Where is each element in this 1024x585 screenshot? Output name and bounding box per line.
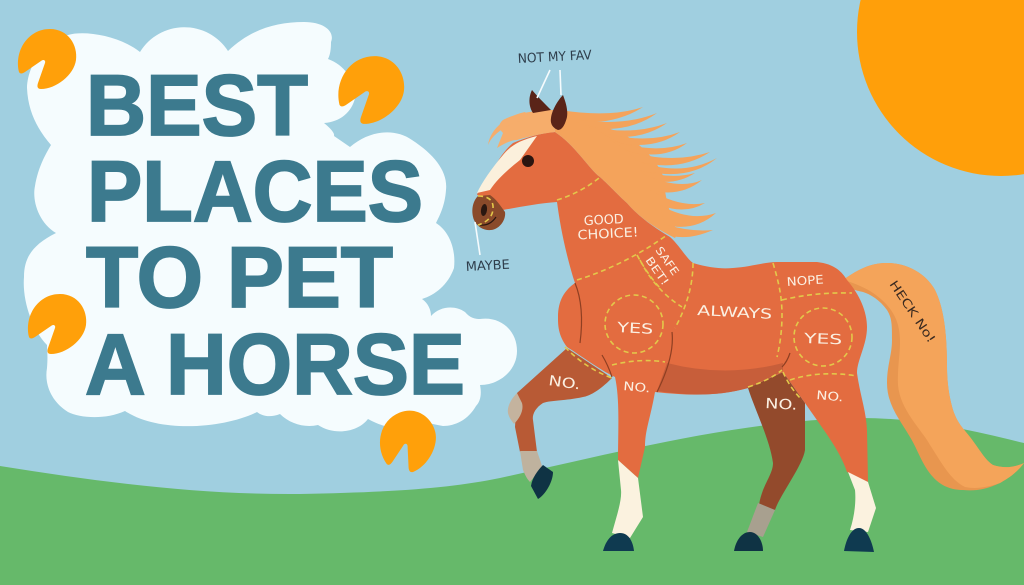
belly shading	[657, 363, 783, 394]
ears	[529, 90, 567, 130]
green hill	[0, 418, 1024, 585]
label: safe bet: SAFE	[653, 244, 682, 278]
label: good choice: GOOD	[583, 212, 624, 229]
eye	[522, 155, 534, 167]
title: BEST	[86, 58, 308, 154]
label: yes shoulder: YES	[615, 320, 654, 338]
labels on horse	[465, 48, 938, 414]
lifted front leg	[508, 348, 612, 499]
nostril and mouth	[478, 196, 496, 225]
label: no back leg: NO.	[765, 396, 798, 414]
hind leg sock and hoof	[844, 472, 876, 552]
horse body and head	[477, 132, 868, 482]
body crease lines	[575, 283, 790, 392]
label: nope: NOPE	[786, 272, 824, 289]
label: no front leg: NO.	[623, 379, 651, 395]
horse illustration	[465, 48, 1024, 552]
label: good choice: CHOICE!	[577, 225, 639, 244]
label: heck no: HECK No!	[887, 278, 938, 345]
tail	[843, 263, 1024, 490]
label: safe bet	[643, 244, 682, 288]
orange hoof print top right	[338, 56, 404, 124]
dashed cut lines	[557, 178, 857, 400]
label: no lifted leg: NO.	[547, 373, 581, 393]
label: no hind leg: NO.	[816, 388, 844, 404]
front leg sock and hoof	[603, 460, 643, 551]
label: not my fav: NOT MY FAV	[517, 48, 592, 67]
blaze	[477, 136, 537, 193]
title	[85, 58, 465, 413]
orange hoof print left	[28, 294, 86, 354]
mane	[552, 107, 717, 238]
leader lines	[475, 70, 561, 255]
title: A HORSE	[85, 317, 465, 413]
label: safe bet: BET!	[643, 254, 672, 288]
label: maybe: MAYBE	[465, 258, 510, 275]
label: always: ALWAYS	[697, 303, 773, 323]
title: PLACES	[87, 144, 423, 240]
orange hoof print top left	[18, 29, 76, 89]
back hind leg	[734, 372, 805, 551]
label: yes hip: YES	[802, 331, 843, 348]
white cloud	[24, 22, 517, 431]
forelock	[488, 110, 555, 148]
sun	[857, 0, 1024, 176]
orange hoof print bottom	[370, 403, 446, 480]
label: good choice	[576, 211, 639, 244]
muzzle	[472, 195, 505, 230]
title: TO PET	[86, 230, 393, 326]
